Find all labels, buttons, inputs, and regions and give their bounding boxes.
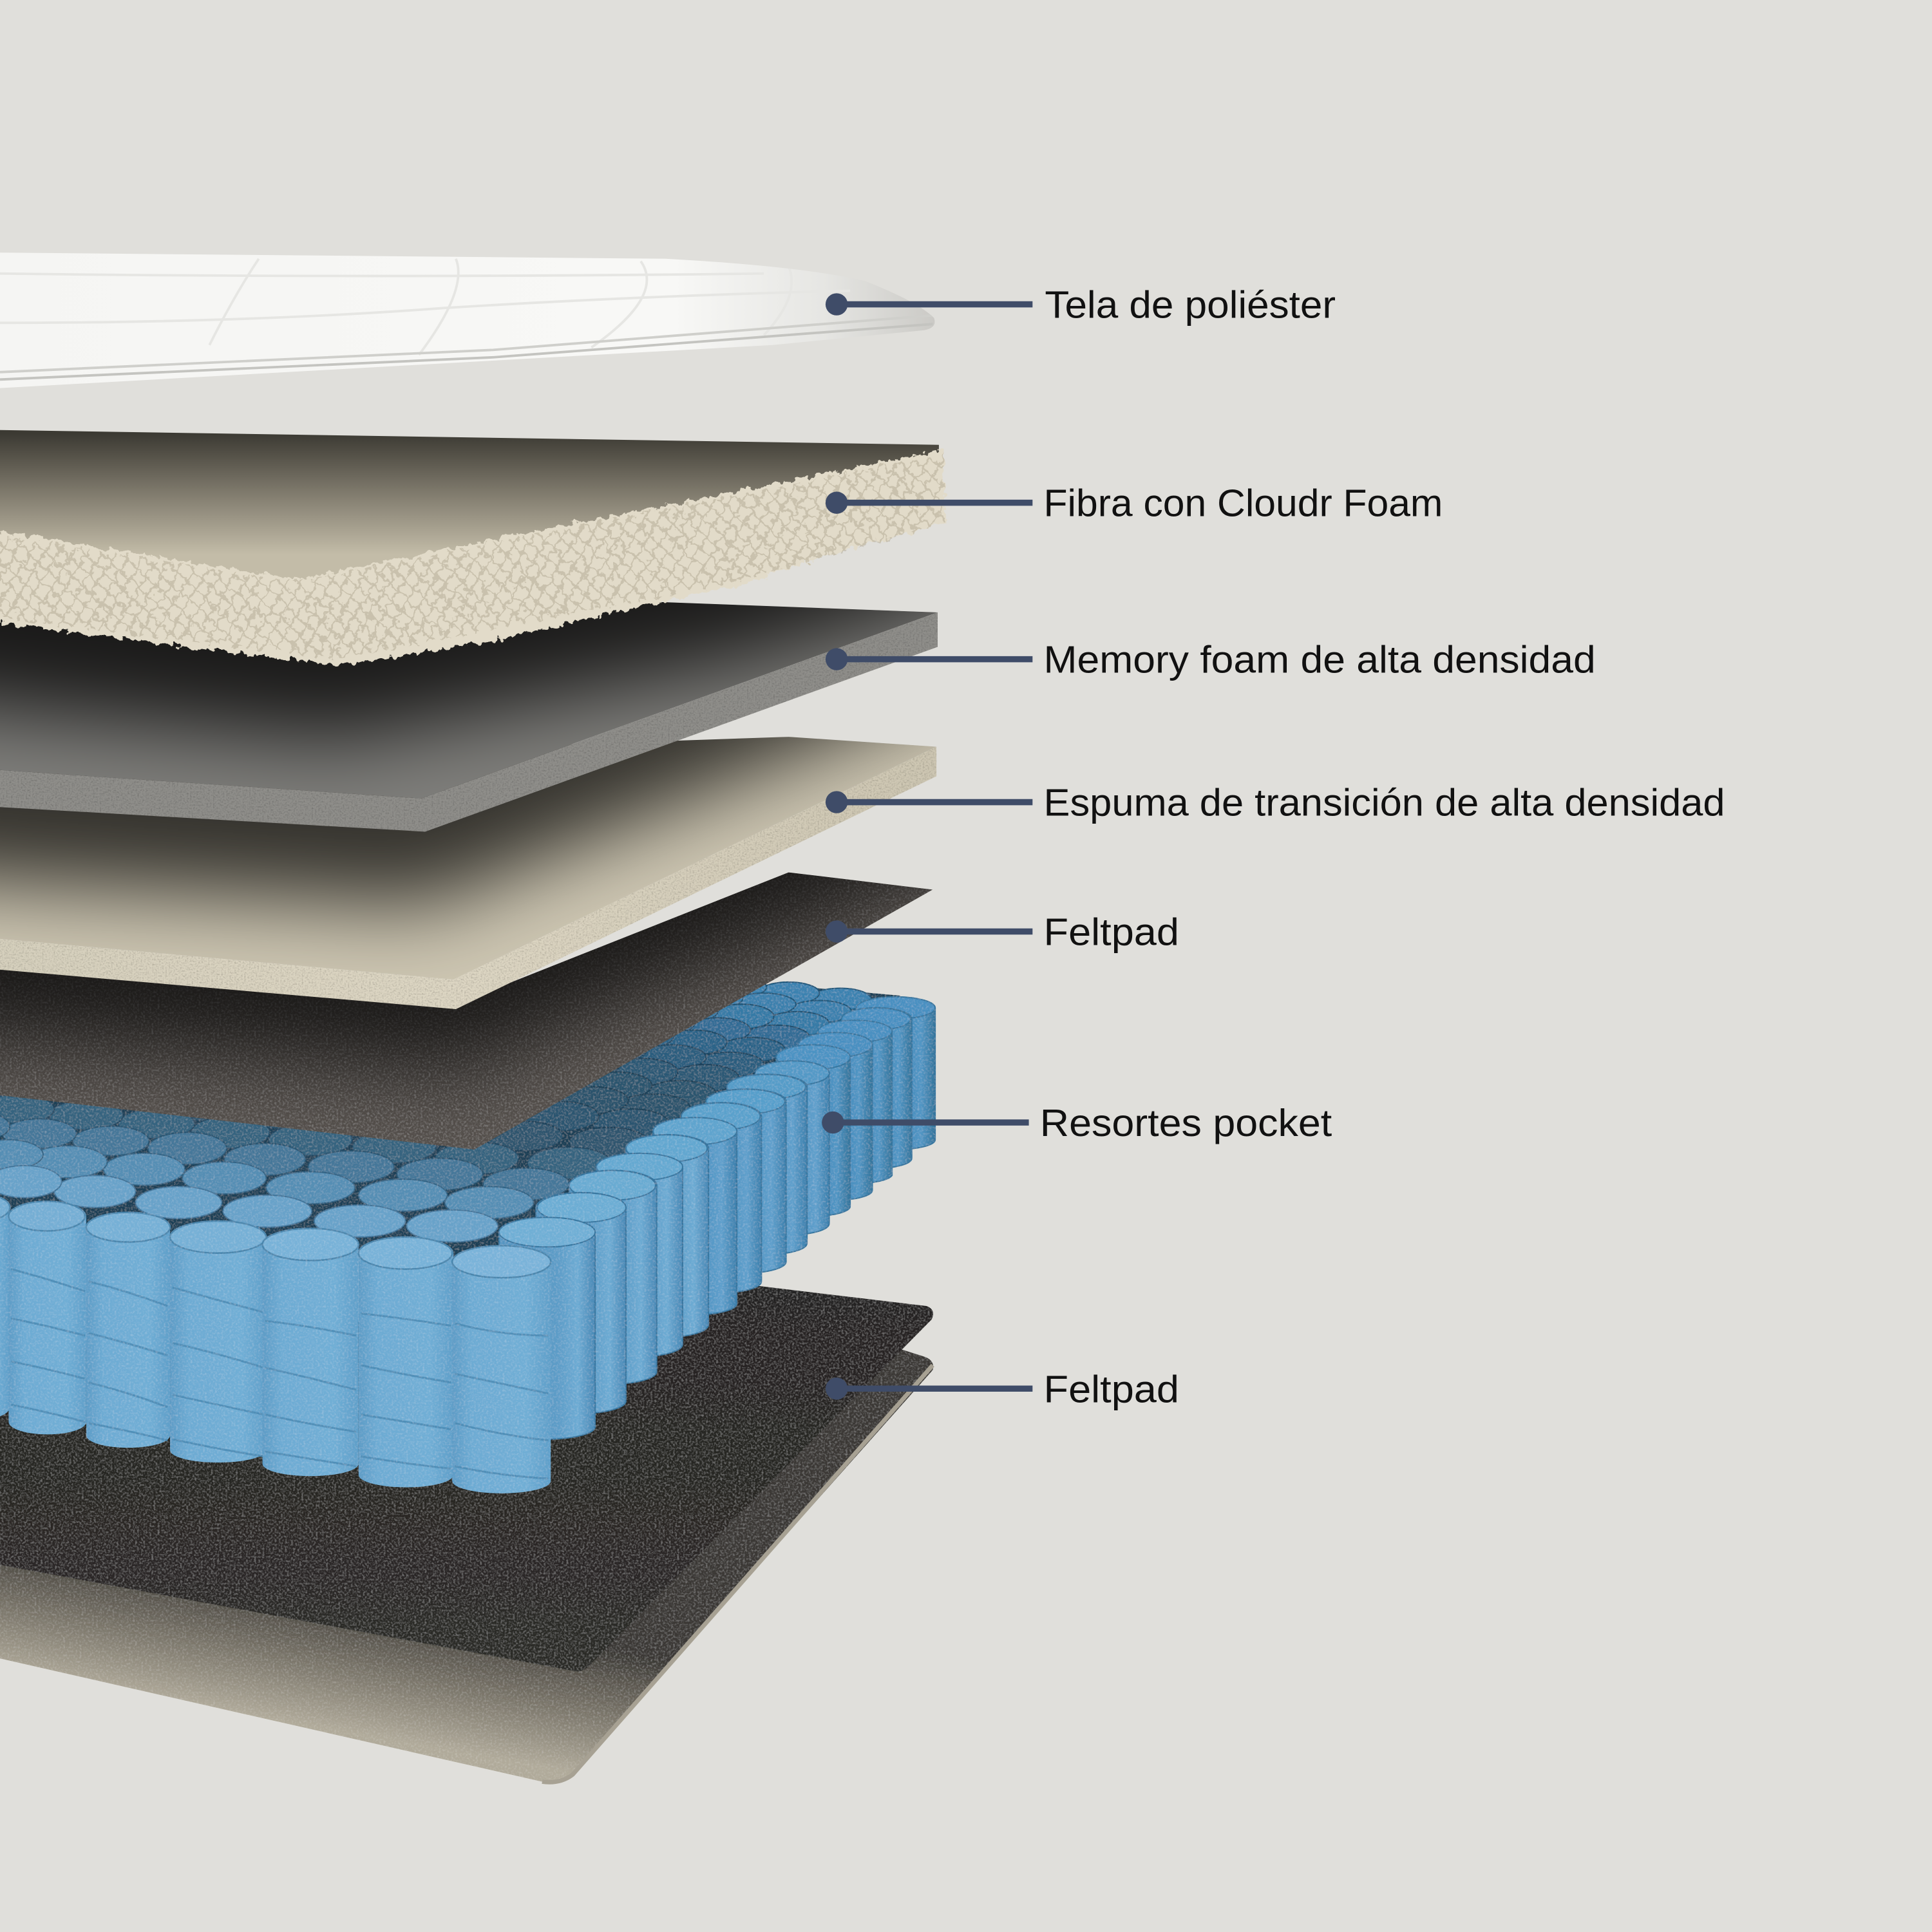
label: Resortes pocket — [822, 1101, 1332, 1144]
label: Feltpad lower — [826, 1367, 1179, 1410]
springs: right side columns — [499, 997, 935, 1439]
springs: dark base under tops — [0, 986, 918, 1269]
label: Fibra con Cloudr Foam — [826, 482, 1443, 525]
layer: fiber with foam — [0, 430, 946, 665]
label: Feltpad upper — [826, 910, 1179, 953]
pocket springs block — [0, 976, 935, 1493]
label: Resortes pocket: Resortes pocket — [1040, 1101, 1332, 1144]
label: Fibra con Cloudr Foam: Fibra con Cloudr Foam — [1044, 482, 1443, 525]
label: Feltpad lower: Feltpad — [1044, 1367, 1179, 1410]
label: Feltpad upper: Feltpad — [1044, 910, 1179, 953]
layer: polyester top cover — [0, 252, 934, 388]
layer: bottom beige pad — [0, 1306, 933, 1782]
label: Memory foam de alta densidad: Memory foam de alta densidad — [1044, 638, 1596, 681]
layer: lower feltpad — [0, 1285, 933, 1671]
mattress layers infographic — [0, 252, 1723, 1785]
label: Espuma de transición de alta densidad: Espuma de transición de alta densidad — [1044, 781, 1725, 824]
label: Tela de poliéster: Tela de poliéster — [1045, 283, 1336, 327]
label: Memory foam de alta densidad — [826, 638, 1596, 681]
layer: gray memory foam — [0, 601, 938, 832]
springs: front left columns — [0, 1194, 551, 1493]
label: Tela de poliéster — [826, 283, 1336, 327]
layer: upper feltpad — [0, 872, 933, 1150]
layer: beige transition foam — [0, 737, 936, 1009]
springs: top ends — [0, 976, 871, 1242]
